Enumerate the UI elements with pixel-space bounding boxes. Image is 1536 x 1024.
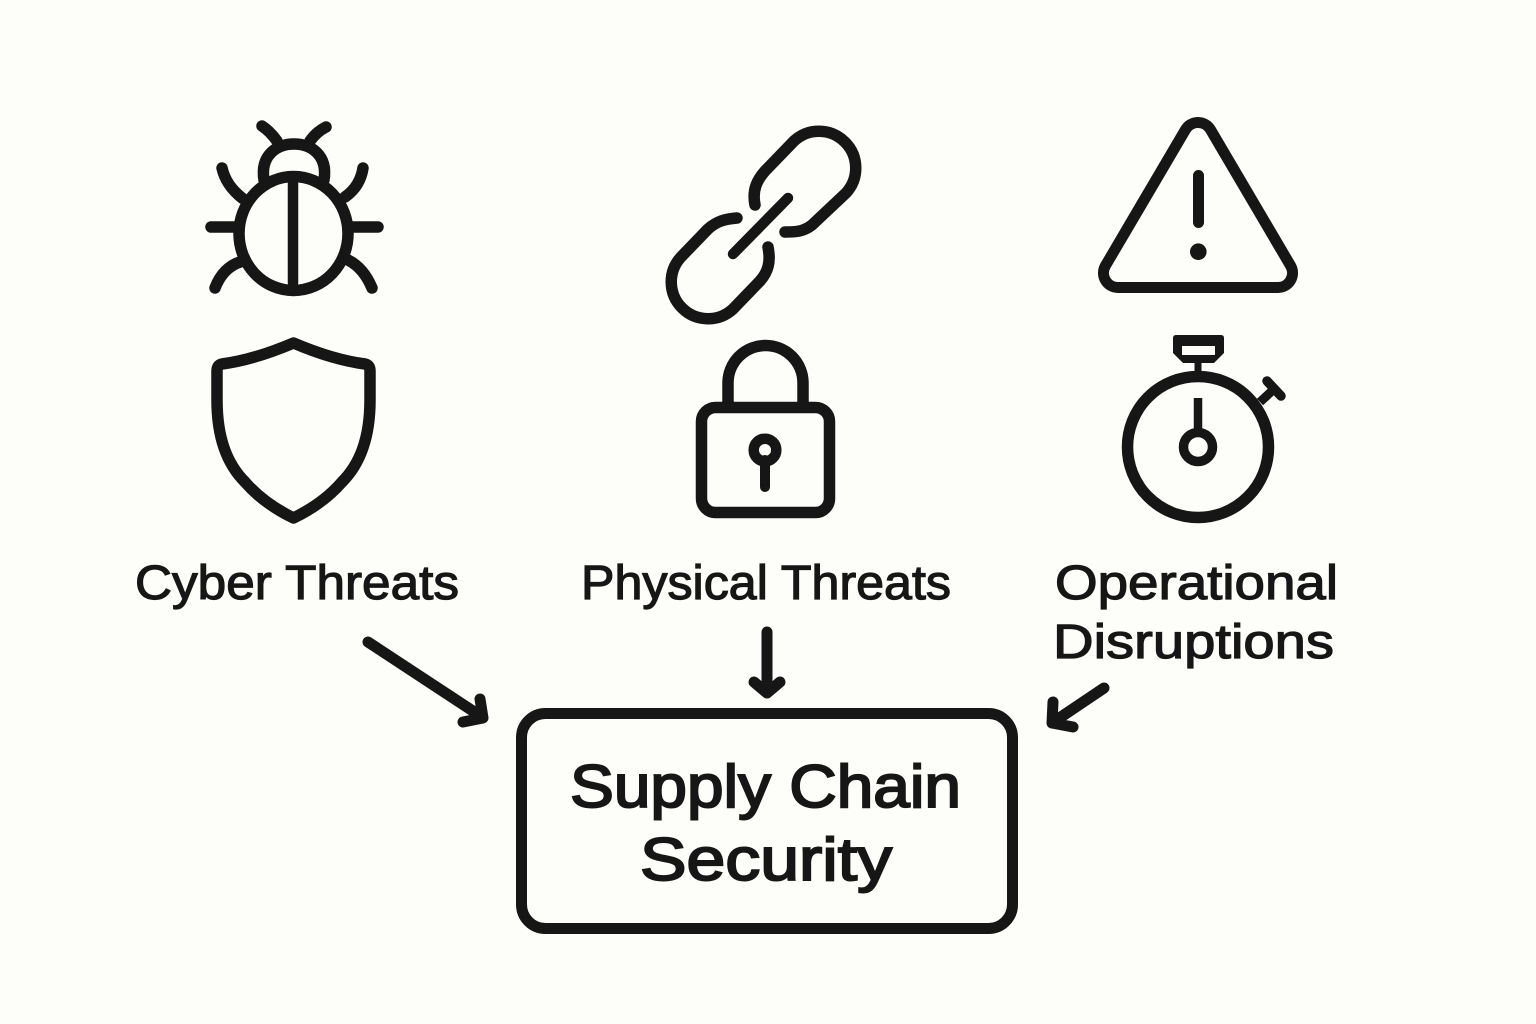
icon: broken chain link	[671, 131, 856, 319]
icon: stopwatch	[1128, 335, 1281, 518]
label: Operational Disruptions: Operational	[1055, 557, 1338, 610]
panel: supply chain security	[522, 714, 1012, 928]
label: Operational Disruptions	[1053, 557, 1338, 669]
arrow: cyber threats to supply chain security	[368, 642, 483, 722]
heading: Supply Chain Security: Security	[640, 826, 892, 893]
icon: shield	[217, 343, 370, 518]
heading: Supply Chain Security: Supply Chain	[570, 753, 961, 820]
icon: warning triangle	[1103, 122, 1293, 288]
label: Cyber Threats: Cyber Threats	[135, 557, 459, 610]
label: Physical Threats: Physical Threats	[581, 557, 951, 610]
icon: padlock	[702, 346, 830, 512]
label: Operational Disruptions: Disruptions	[1053, 616, 1334, 669]
arrow: physical threats to supply chain security	[754, 632, 780, 693]
heading: Supply Chain Security	[570, 753, 961, 893]
arrow: operational disruptions to supply chain security	[1052, 688, 1104, 727]
icon: bug	[211, 126, 378, 290]
